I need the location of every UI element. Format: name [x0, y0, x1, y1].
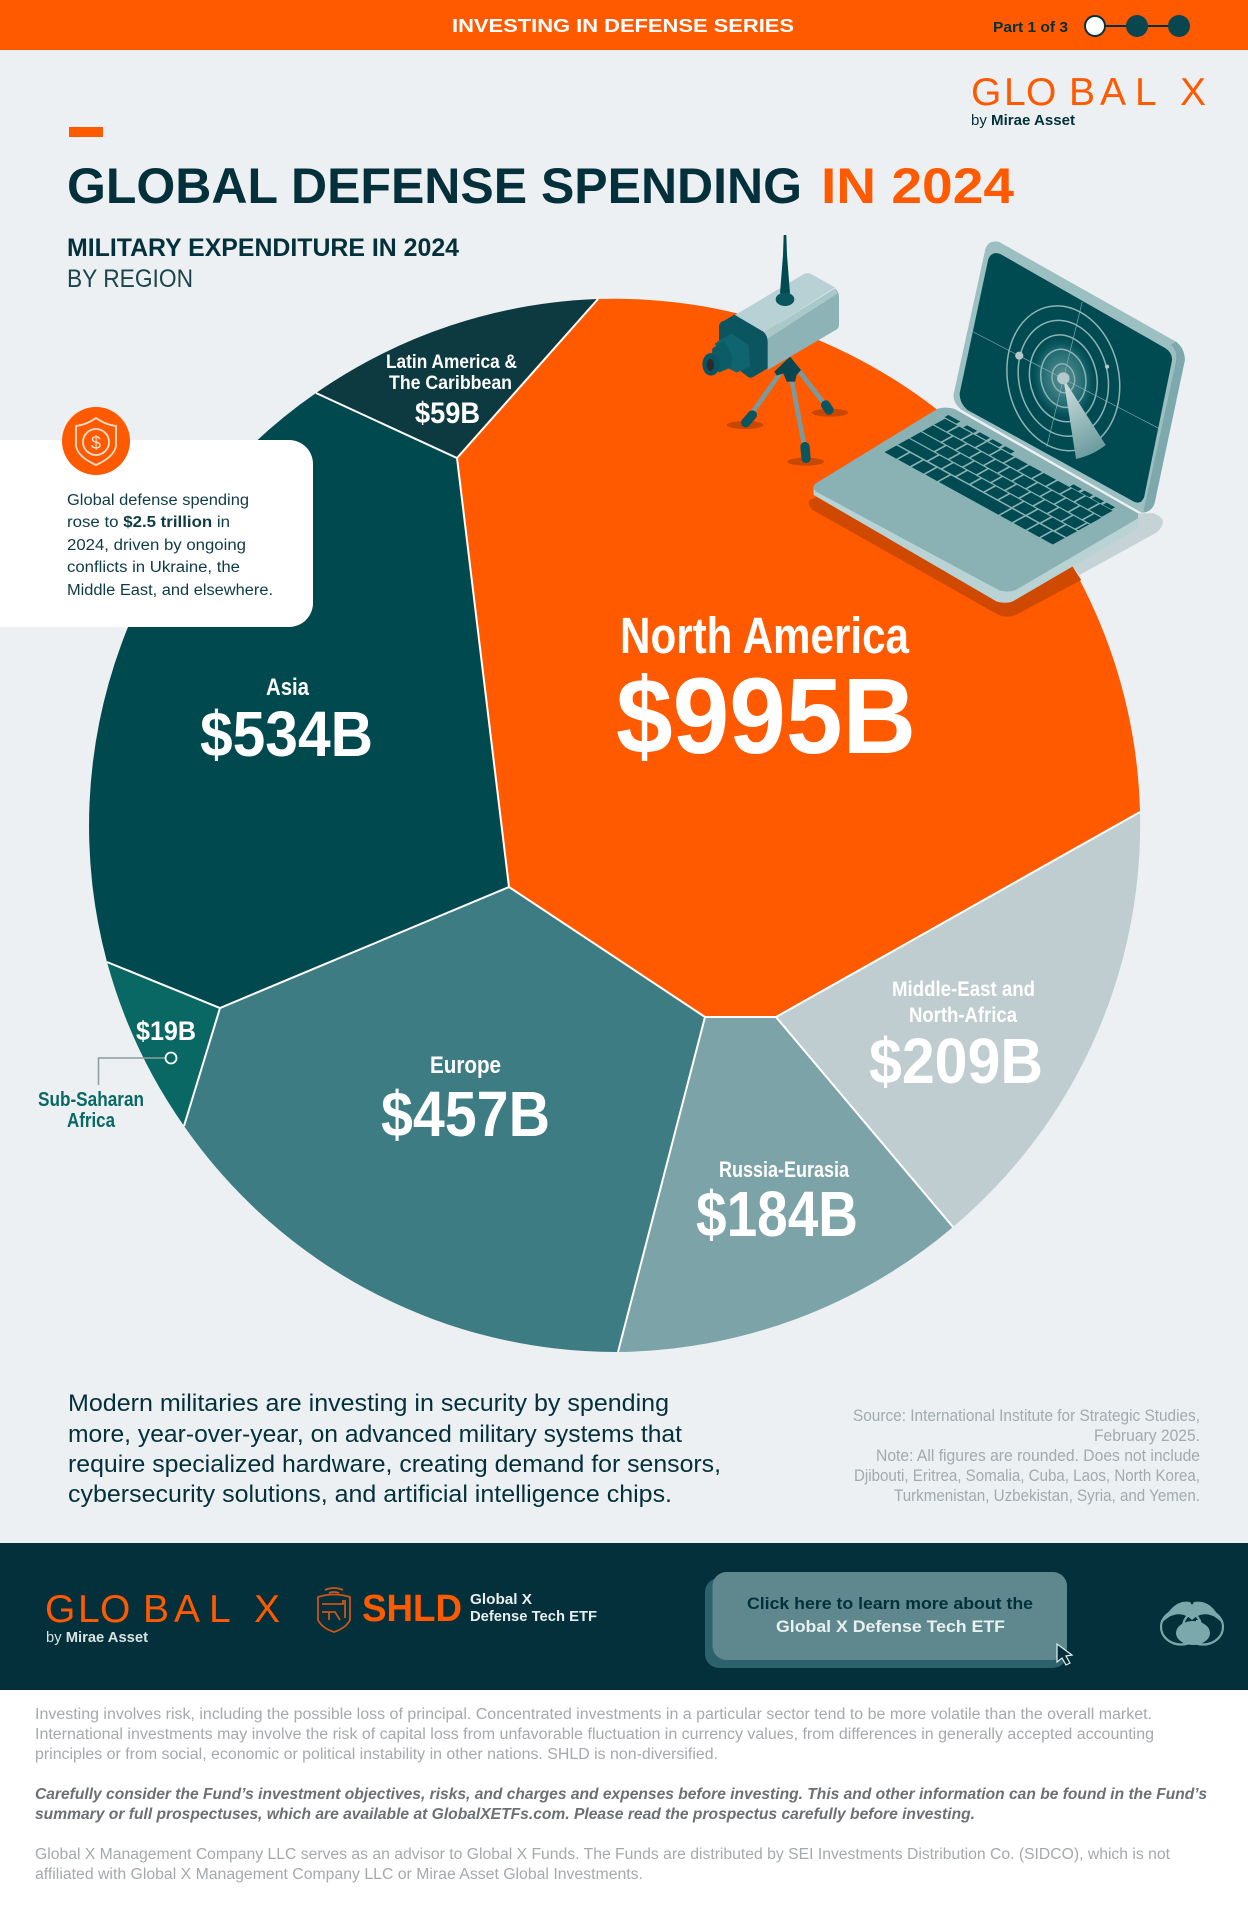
callout: global defense spending: rose to $2.5 trillion in: [67, 514, 230, 531]
label: Latin America: Latin America &: [386, 352, 517, 373]
segment: Europe: [184, 887, 705, 1352]
text: source and note: [853, 1406, 1200, 1505]
footer band: [0, 1543, 1248, 1690]
label: Sub-Saharan Africa: [38, 1016, 196, 1132]
label: Europe: Europe: [430, 1052, 501, 1079]
subtitle: [67, 234, 459, 293]
text: source and note: Note: All figures are rounded. Does not include: [876, 1446, 1200, 1465]
disclaimer panel: [0, 1690, 1248, 1920]
top banner: Part 1 of 3: [993, 20, 1068, 36]
disclaimer panel: Investing involves risk, including the possible loss of principal. Concentrated investments in a particular sector tend to be more volatile than the overall market.: [35, 1706, 1152, 1723]
disclaimer panel: principles or from social, economic or political instability in other nations. SHLD is non-diversified.: [35, 1746, 718, 1763]
segment: Asia: [89, 393, 509, 1008]
label: Sub-Saharan Africa: Africa: [67, 1110, 116, 1132]
icon: shield with dollar: $: [91, 433, 101, 453]
top banner: INVESTING IN DEFENSE SERIES: [452, 16, 794, 36]
callout: global defense spending: Global defense spending: [67, 492, 249, 509]
label: Europe: $457B: [381, 1078, 550, 1150]
label: North America: North America: [620, 607, 910, 664]
label: Russia-Eurasia: Russia-Eurasia: [719, 1157, 850, 1182]
button: learn more: [705, 1572, 1067, 1668]
segment: North America: [457, 299, 1140, 1017]
illustration: laptop with radar screen: [809, 241, 1185, 617]
callout: global defense spending: [0, 407, 313, 627]
segment: Middle-East and North-Africa: [776, 812, 1140, 1227]
segment: Latin America and the Caribbean: [316, 299, 598, 458]
disclaimer panel: Global X Management Company LLC serves as an advisor to Global X Funds. The Funds are distributed by SEI Investments Distribution Co. (SIDCO), which is not: [35, 1846, 1171, 1863]
label: Latin America: $59B: [415, 397, 480, 430]
label: Russia-Eurasia: [696, 1157, 858, 1250]
logo: Global X footer: GLOBAL X: [45, 1588, 280, 1631]
disclaimer panel: International investments may involve the risk of capital loss from unfavorable fluctuation in currency values, from differences in generally accepted accounting: [35, 1726, 1154, 1743]
title: IN 2024: [821, 158, 1014, 214]
disclaimer panel: summary or full prospectuses, which are available at GlobalXETFs.com. Please read the prospectus carefully before investing.: [35, 1806, 975, 1823]
subtitle: MILITARY EXPENDITURE IN 2024: [67, 234, 459, 262]
title: GLOBAL DEFENSE SPENDING: [67, 158, 802, 214]
text: source and note: February 2025.: [1094, 1426, 1200, 1445]
label: Middle-East and North-Africa: North-Africa: [909, 1004, 1017, 1027]
subtitle: BY REGION: [67, 265, 193, 293]
icon: cursor: [1057, 1644, 1072, 1665]
label: Europe: [381, 1052, 550, 1150]
label: North America: [616, 607, 916, 776]
label: Sub-Saharan Africa: $19B: [136, 1016, 196, 1046]
label: Latin America: [386, 352, 517, 430]
text: closing paragraph: more, year-over-year, on advanced military systems that: [68, 1421, 682, 1448]
title accent: [69, 127, 103, 137]
label: SHLD ETF: Defense Tech ETF: [470, 1609, 597, 1625]
icon: binoculars with piggy bank: [1161, 1602, 1223, 1645]
label: SHLD ETF: [362, 1588, 597, 1630]
label: SHLD ETF: SHLD: [362, 1588, 462, 1630]
label: Latin America: The Caribbean: [389, 373, 512, 394]
callout: global defense spending: Middle East, and elsewhere.: [67, 582, 273, 599]
icon: SHLD shield: [318, 1588, 350, 1632]
radar display: [973, 283, 1159, 473]
label: North America: $995B: [616, 655, 916, 776]
segment: Sub-Saharan Africa: [107, 962, 220, 1126]
segment: Russia-Eurasia: [618, 1017, 953, 1352]
callout: global defense spending: 2024, driven by ongoing: [67, 537, 246, 554]
text: source and note: Source: International Institute for Strategic Studies,: [853, 1406, 1200, 1425]
button: learn more: Click here to learn more about the: [747, 1594, 1033, 1613]
disclaimer panel: Carefully consider the Fund’s investment objectives, risks, and charges and expenses before investing. This and other information can be found in the Fund’s: [35, 1786, 1207, 1803]
callout: global defense spending: conflicts in Ukraine, the: [67, 559, 240, 576]
top banner: [0, 0, 1248, 50]
label: Middle-East and North-Africa: [869, 978, 1043, 1097]
label: Asia: Asia: [266, 674, 310, 701]
icon: shield with dollar: [62, 407, 130, 475]
label: Russia-Eurasia: $184B: [696, 1178, 858, 1250]
logo: Global X top: by Mirae Asset: [971, 113, 1075, 129]
label: Sub-Saharan Africa: Sub-Saharan: [38, 1089, 144, 1111]
text: closing paragraph: cybersecurity solutions, and artificial intelligence chips.: [68, 1481, 672, 1508]
illustration: security camera on tripod: [702, 235, 848, 466]
label: Middle-East and North-Africa: $209B: [869, 1025, 1043, 1097]
logo: Global X footer: by Mirae Asset: [46, 1630, 148, 1646]
label: Middle-East and North-Africa: Middle-East and: [892, 978, 1035, 1001]
text: source and note: Turkmenistan, Uzbekistan, Syria, and Yemen.: [894, 1486, 1200, 1505]
label: SHLD ETF: Global X: [470, 1592, 532, 1608]
text: closing paragraph: Modern militaries are investing in security by spending: [68, 1390, 669, 1417]
laptop keyboard: [889, 416, 1116, 541]
label: Asia: $534B: [200, 698, 373, 770]
text: closing paragraph: [68, 1390, 721, 1508]
logo: Global X top: GLOBAL X: [971, 71, 1206, 114]
text: closing paragraph: require specialized hardware, creating demand for sensors,: [68, 1451, 721, 1478]
text: source and note: Djibouti, Eritrea, Somalia, Cuba, Laos, North Korea,: [854, 1466, 1200, 1485]
disclaimer panel: affiliated with Global X Management Company LLC or Mirae Asset Global Investments.: [35, 1866, 643, 1883]
pie chart: military expenditure by region: [89, 299, 1140, 1352]
button: learn more: Global X Defense Tech ETF: [776, 1617, 1005, 1636]
